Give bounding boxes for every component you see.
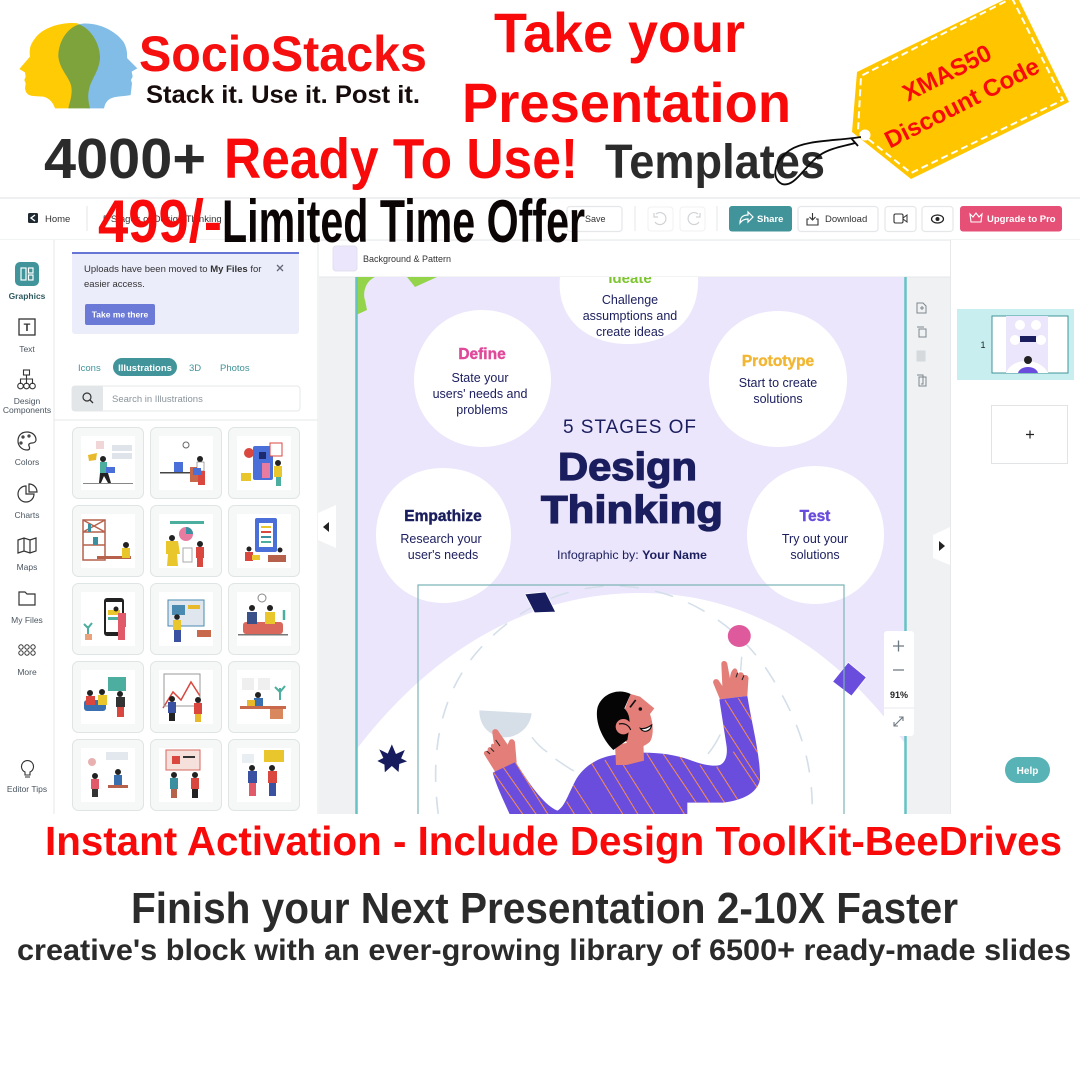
sidebar navigation: Maps — [17, 562, 37, 572]
bubble: test: Test — [800, 508, 830, 525]
collapse handles — [318, 505, 336, 548]
juggling figure — [479, 657, 763, 817]
left hand — [484, 729, 517, 772]
tabs: Icons — [78, 363, 101, 374]
ear — [616, 719, 631, 734]
sidebar navigation: Charts — [14, 510, 40, 520]
offer line: 499 limited time offer — [98, 188, 585, 255]
help button: Help — [1017, 766, 1038, 777]
sidebar navigation: Graphics — [9, 291, 46, 301]
selection box — [418, 585, 844, 814]
icon: text — [19, 319, 35, 335]
green corner shapes — [356, 277, 437, 315]
icon: colors — [18, 432, 36, 450]
notice box: easier access. — [84, 279, 145, 290]
slide thumbnail — [992, 316, 1068, 373]
sweater — [488, 693, 763, 817]
toolbar: Download — [825, 214, 867, 225]
logo mark: two heads — [19, 23, 137, 108]
title: 5 stages of design thinking: Infographic by: Your Name — [557, 548, 707, 562]
graphics panel — [54, 240, 318, 814]
bubble: define: Define — [458, 346, 506, 363]
tabs: Illustrations — [118, 363, 172, 374]
headline: 4000+ ready to use templates: Ready To Use! — [224, 127, 578, 191]
bubble: test: Try out your — [782, 532, 848, 546]
neck — [615, 740, 644, 765]
icon: more — [19, 645, 35, 655]
app screenshot — [0, 198, 1080, 817]
headline: 4000+ ready to use templates: 4000+ — [44, 127, 206, 191]
tabs: 3D — [189, 363, 201, 374]
notice box: Uploads have been moved to My Files for — [84, 264, 261, 275]
discount tag: Discount Code — [880, 53, 1044, 154]
toolbar: 5 Stages of Design Thinking — [103, 214, 222, 225]
offer line: 499 limited time offer: 499/- — [98, 188, 222, 255]
bubble: test — [747, 466, 884, 604]
sidebar navigation: Components — [3, 405, 51, 415]
bubble: define: problems — [456, 403, 508, 417]
canvas workspace: Background & Pattern — [363, 254, 451, 264]
toolbar: Save — [585, 214, 606, 224]
side tools — [917, 303, 926, 386]
bubble: ideate — [560, 270, 698, 344]
dashed orbit — [436, 586, 812, 813]
right hand — [713, 661, 749, 699]
heading: finish your next presentation: Finish your Next Presentation 2-10X Faster — [131, 884, 958, 933]
search box: Search in Illustrations — [112, 394, 203, 405]
headline: 4000+ ready to use templates: Templates — [605, 136, 825, 189]
row 2 — [83, 518, 286, 567]
bubble: empathize: Research your — [400, 532, 482, 546]
shape: pink circle — [728, 625, 751, 647]
row 5 — [88, 750, 284, 798]
face details — [619, 700, 652, 731]
bubble: prototype: Prototype — [742, 353, 815, 370]
row 3 — [84, 594, 288, 642]
canvas workspace — [318, 240, 950, 817]
right slides panel: 1 — [980, 340, 986, 350]
icon: charts — [18, 484, 37, 502]
notice box: Take me there — [92, 310, 149, 320]
banner: instant activation: Instant Activation - Include Design ToolKit-BeeDrives — [45, 818, 1062, 864]
zoom control: 91% — [890, 690, 908, 700]
tabs — [78, 358, 250, 376]
row 4 — [84, 674, 286, 722]
discount tag: XMAS50 — [898, 40, 996, 107]
bubble: define: State your — [452, 371, 508, 385]
add slide button — [992, 406, 1068, 464]
notice box — [72, 252, 299, 334]
bubble: ideate: create ideas — [596, 325, 664, 339]
toolbar: Upgrade to Pro — [987, 214, 1056, 225]
sidebar navigation — [0, 240, 54, 814]
discount tag — [775, 0, 1069, 184]
sidebar navigation: Colors — [15, 457, 39, 467]
icon: my files — [19, 592, 35, 605]
title: 5 stages of design thinking — [541, 417, 723, 562]
inner orbit dashes — [532, 657, 742, 771]
bubble: prototype: Start to create — [739, 376, 817, 390]
headline: take your presentation — [462, 1, 791, 134]
bubble: ideate: assumptions and — [583, 309, 677, 323]
shape: navy star — [377, 744, 407, 772]
sidebar navigation: My Files — [11, 615, 43, 625]
orbit and floating shapes — [377, 586, 866, 813]
logo tagline: Stack it. Use it. Post it. — [146, 81, 420, 109]
zoom control — [884, 631, 914, 736]
bubble: define: users' needs and — [433, 387, 527, 401]
sidebar navigation: Editor Tips — [7, 784, 47, 794]
bubble: test: solutions — [790, 548, 840, 562]
shape: bowl — [479, 710, 532, 737]
illustration thumbnails — [72, 428, 300, 810]
logo — [19, 23, 427, 109]
title: 5 stages of design thinking: Design — [558, 446, 697, 489]
icon: text: T — [24, 322, 31, 334]
toolbar: Home — [45, 214, 70, 225]
headline: 4000+ ready to use templates — [44, 127, 825, 191]
icon: editor tips — [22, 761, 34, 777]
bubble: empathize: user's needs — [408, 548, 478, 562]
sidebar navigation: Text — [19, 344, 35, 354]
bubble: ideate: Challenge — [602, 293, 658, 307]
right slides panel — [950, 240, 1080, 814]
bubble: prototype — [709, 311, 847, 447]
icon: graphics — [15, 262, 39, 286]
help button — [1005, 757, 1050, 783]
bubble: ideate: Ideate — [608, 270, 652, 287]
white arc — [356, 593, 906, 814]
face — [624, 694, 654, 746]
bubble: empathize: Empathize — [404, 508, 482, 525]
row 1 — [83, 441, 282, 486]
title: 5 stages of design thinking: Thinking — [541, 489, 723, 532]
hair — [597, 692, 631, 750]
icon: maps — [18, 538, 36, 553]
logo wordmark: SocioStacks — [139, 26, 427, 82]
headline: take your presentation: Take your — [494, 1, 745, 64]
tag string — [775, 137, 861, 184]
tabs: Photos — [220, 363, 250, 374]
shape: purple diamond — [833, 662, 866, 696]
canvas edges — [355, 277, 358, 814]
toolbar — [0, 198, 1080, 240]
icon: design components — [18, 370, 35, 389]
toolbar: Share — [757, 214, 783, 225]
bubble: define — [414, 310, 551, 447]
subheading: slide library: creative's block with an ever-growing library of 6500+ ready-made slides — [17, 934, 1071, 967]
infographic page — [356, 270, 906, 817]
bubble: prototype: solutions — [753, 392, 803, 406]
offer line: 499 limited time offer: Limited Time Offer — [222, 188, 585, 255]
sidebar navigation: Design — [14, 396, 40, 406]
shape: navy diamond — [525, 592, 556, 613]
bubble: empathize — [376, 468, 511, 603]
sidebar navigation: More — [17, 667, 37, 677]
search box — [72, 386, 300, 411]
headline: take your presentation: Presentation — [462, 71, 791, 134]
title: 5 stages of design thinking: 5 STAGES OF — [563, 417, 696, 438]
